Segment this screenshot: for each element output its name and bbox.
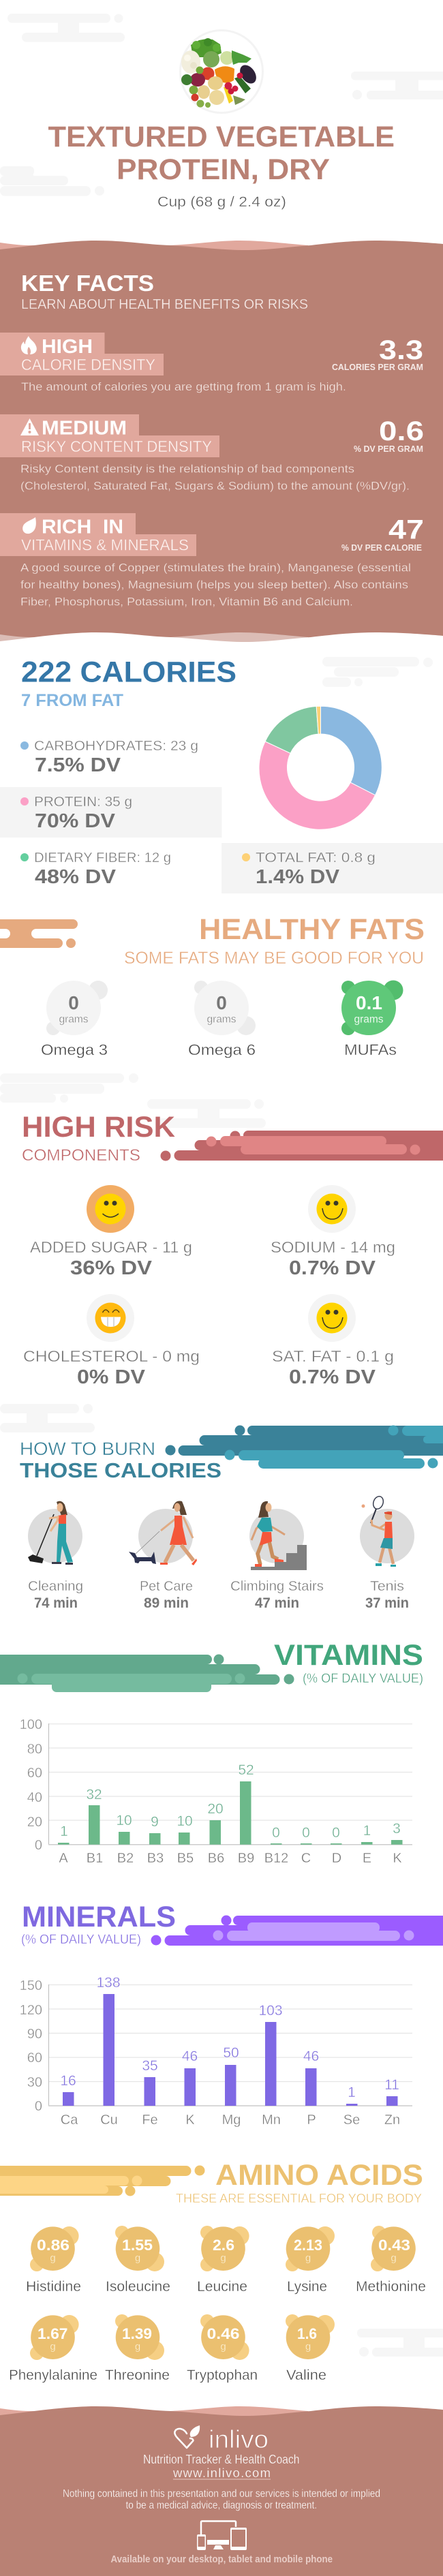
- bar chart: vitamins: E: [363, 1851, 371, 1866]
- bar chart: minerals: Se: [343, 2113, 360, 2128]
- amino: tryptophan: Tryptophan: [187, 2367, 258, 2383]
- activity: cleaning: 74 min: [34, 1595, 78, 1611]
- amino: leucine: g: [220, 2252, 226, 2264]
- bar chart: minerals: 1: [348, 2085, 356, 2100]
- activity: pet care: Pet Care: [140, 1579, 193, 1594]
- component: sodium: SODIUM - 14 mg: [271, 1238, 395, 1256]
- amino: valine: 1.6: [297, 2325, 317, 2342]
- bar chart: vitamins: 52: [238, 1762, 254, 1778]
- vitamins subheading: (% OF DAILY VALUE): [303, 1672, 423, 1686]
- bar chart: vitamins: B12: [264, 1851, 288, 1866]
- activity: cleaning: Cleaning: [28, 1579, 83, 1594]
- amino acids heading: AMINO ACIDS: [215, 2159, 423, 2192]
- component: cholesterol: [23, 1294, 200, 1388]
- amino: phenylalanine: Phenylalanine: [9, 2367, 97, 2383]
- panel: burn calories: [0, 1404, 443, 1611]
- amino: isoleucine: Isoleucine: [106, 2279, 170, 2295]
- fact: rich in vitamins and minerals: 47: [388, 515, 424, 545]
- fact: risky content density: RISKY CONTENT DENSITY: [21, 438, 212, 455]
- activity: climbing stairs: [230, 1501, 324, 1611]
- fat: MUFAs: grams: [354, 1014, 384, 1026]
- fact: calorie density: [0, 333, 423, 393]
- activity: tennis: 37 min: [365, 1595, 409, 1611]
- amino: phenylalanine: g: [50, 2341, 56, 2352]
- bar chart: vitamins: 80: [27, 1742, 42, 1757]
- fat: omega 6: 0: [216, 992, 227, 1013]
- amino: lysine: g: [305, 2252, 311, 2264]
- bar chart: minerals: [20, 1975, 412, 2128]
- fat: omega 6: [188, 981, 256, 1058]
- amino: lysine: 2.13: [294, 2237, 322, 2254]
- bar chart: vitamins: B2: [117, 1851, 134, 1866]
- bar chart: vitamins: 40: [27, 1790, 42, 1805]
- amino: lysine: Lysine: [287, 2279, 327, 2295]
- bar chart: vitamins: B9: [238, 1851, 254, 1866]
- banner: vitamins: [0, 1655, 294, 1692]
- healthy fats subheading: SOME FATS MAY BE GOOD FOR YOU: [124, 949, 424, 968]
- banner: high risk: [161, 1131, 443, 1161]
- component: cholesterol: 0% DV: [77, 1366, 146, 1388]
- bar chart: minerals: 50: [223, 2045, 239, 2061]
- bar chart: vitamins: 20: [27, 1815, 42, 1830]
- component: cholesterol: CHOLESTEROL - 0 mg: [23, 1347, 200, 1365]
- high risk subheading: COMPONENTS: [22, 1146, 140, 1165]
- activity: cleaning: [28, 1501, 83, 1611]
- bar chart: vitamins: 9: [151, 1814, 159, 1830]
- panel: high risk: [0, 1073, 443, 1388]
- bar chart: minerals: 150: [20, 1978, 42, 1993]
- activity: climbing stairs: 47 min: [255, 1595, 299, 1611]
- activity: tennis: [360, 1495, 414, 1611]
- icon: devices: [197, 2521, 247, 2550]
- fact: rich in vitamins and minerals: % DV PER CALORIE: [341, 543, 422, 553]
- fact: risky content density: [0, 414, 424, 493]
- bar chart: minerals: K: [185, 2113, 195, 2128]
- bar chart: vitamins: B1: [87, 1851, 103, 1866]
- logo: inlivo: inlivo: [209, 2425, 269, 2453]
- activity: tennis: Tenis: [370, 1579, 404, 1594]
- donut chart: [259, 706, 382, 829]
- burn calories heading: HOW TO BURN: [20, 1439, 155, 1459]
- bar chart: minerals: 103: [258, 2003, 283, 2019]
- fact: risky content density: (Cholesterol, Saturated Fat, Sugars & Sodium) to the amount (%DV/gr).: [20, 480, 410, 493]
- icon: flame: [21, 336, 37, 354]
- healthy fats heading: HEALTHY FATS: [199, 913, 425, 946]
- bar chart: minerals: 138: [96, 1975, 121, 1991]
- amino: phenylalanine: [9, 2315, 97, 2383]
- amino: lysine: [286, 2226, 330, 2295]
- burn calories heading: [20, 1439, 222, 1482]
- fact: calorie density: 3.3: [379, 335, 423, 365]
- bar chart: vitamins: B3: [147, 1851, 164, 1866]
- fat: MUFAs: MUFAs: [344, 1041, 397, 1058]
- bar chart: vitamins: 0: [35, 1838, 42, 1853]
- macro: total fat: 1.4% DV: [256, 866, 340, 888]
- bar chart: vitamins: 20: [207, 1801, 224, 1817]
- amino: threonine: g: [135, 2341, 140, 2352]
- fact: rich in vitamins and minerals: [0, 513, 424, 609]
- bar chart: minerals: 11: [384, 2077, 399, 2093]
- bar chart: vitamins: 10: [116, 1813, 132, 1828]
- title: PROTEIN, DRY: [117, 153, 330, 186]
- fat: omega 3: 0: [68, 992, 79, 1013]
- component: saturated fat: SAT. FAT - 0.1 g: [272, 1347, 394, 1365]
- bar chart: vitamins: 60: [27, 1766, 42, 1781]
- logo: inlivo: [174, 2425, 269, 2453]
- amino: leucine: Leucine: [197, 2279, 247, 2295]
- vitamins heading: VITAMINS: [274, 1639, 423, 1672]
- disclaimer: Nothing contained in this presentation and our services is intended or implied: [63, 2488, 380, 2500]
- amino: histidine: g: [50, 2252, 56, 2264]
- macro: protein: PROTEIN: 35 g: [34, 795, 132, 810]
- amino: histidine: [26, 2226, 81, 2295]
- macro: protein: 70% DV: [35, 810, 116, 832]
- banner: minerals: [151, 1915, 443, 1946]
- amino: valine: Valine: [286, 2367, 326, 2383]
- component: added sugar: ADDED SUGAR - 11 g: [30, 1238, 192, 1256]
- key facts subheading: LEARN ABOUT HEALTH BENEFITS OR RISKS: [21, 297, 308, 312]
- panel: amino acids: [0, 2159, 443, 2383]
- bar chart: vitamins: [20, 1717, 412, 1866]
- amino: tryptophan: 0.46: [207, 2325, 240, 2342]
- bar chart: minerals: Ca: [61, 2113, 78, 2128]
- calories heading: 222 CALORIES: [21, 656, 236, 689]
- bar chart: minerals: 46: [182, 2049, 198, 2064]
- fat: omega 3: grams: [59, 1014, 89, 1026]
- bar chart: minerals: Zn: [384, 2113, 400, 2128]
- bar chart: minerals: P: [307, 2113, 316, 2128]
- bar chart: minerals: 120: [20, 2003, 42, 2018]
- macro: dietary fiber: [20, 850, 171, 888]
- fat: omega 6: Omega 6: [188, 1041, 256, 1058]
- bar chart: vitamins: 32: [86, 1787, 102, 1803]
- icon: leaf: [22, 517, 36, 534]
- banner: amino acids: [0, 2166, 204, 2196]
- fat: omega 3: [41, 981, 108, 1058]
- fact: calorie density: HIGH: [42, 336, 93, 358]
- amino acids subheading: THESE ARE ESSENTIAL FOR YOUR BODY: [176, 2191, 422, 2205]
- banner: burn calories: [165, 1426, 443, 1469]
- fact: calorie density: CALORIE DENSITY: [21, 356, 155, 373]
- amino: valine: [286, 2315, 330, 2383]
- decorative clouds: header: [0, 14, 443, 196]
- amino: methionine: [356, 2226, 426, 2295]
- amino: tryptophan: g: [220, 2341, 226, 2352]
- bar chart: minerals: Mn: [262, 2113, 281, 2128]
- macro: dietary fiber: DIETARY FIBER: 12 g: [34, 850, 171, 865]
- macro: carbohydrates: 7.5% DV: [35, 754, 121, 776]
- amino: methionine: 0.43: [378, 2237, 410, 2254]
- burn calories heading: THOSE CALORIES: [20, 1458, 222, 1482]
- amino: methionine: Methionine: [356, 2279, 426, 2295]
- amino: methionine: g: [391, 2252, 397, 2264]
- bar chart: minerals: 90: [27, 2027, 42, 2042]
- bar chart: minerals: 0: [35, 2099, 42, 2114]
- amino: histidine: 0.86: [37, 2237, 70, 2254]
- activity: climbing stairs: Climbing Stairs: [230, 1579, 324, 1594]
- bar chart: minerals: 30: [27, 2075, 42, 2090]
- disclaimer: to be a medical advice, diagnosis or treatment.: [125, 2500, 317, 2511]
- macro: carbohydrates: CARBOHYDRATES: 23 g: [34, 739, 198, 754]
- bar chart: vitamins: 0: [272, 1825, 280, 1841]
- footer: [0, 2406, 443, 2576]
- amino: leucine: [197, 2226, 247, 2295]
- fact: risky content density: Risky Content density is the relationship of bad components: [20, 463, 354, 476]
- fact: rich in vitamins and minerals: VITAMINS & MINERALS: [21, 536, 189, 553]
- bar chart: vitamins: 3: [393, 1821, 401, 1837]
- panel: vitamins: [0, 1639, 423, 1866]
- high risk heading: HIGH RISK: [22, 1111, 175, 1144]
- fact: rich in vitamins and minerals: A good source of Copper (stimulates the brain), Manganese (essential: [20, 562, 411, 574]
- macro: protein: [0, 787, 222, 838]
- amino: valine: g: [305, 2341, 311, 2352]
- bar chart: vitamins: B5: [177, 1851, 194, 1866]
- bar chart: vitamins: B6: [208, 1851, 224, 1866]
- macro: dietary fiber: 48% DV: [35, 866, 117, 888]
- availability note: Available on your desktop, tablet and mobile phone: [110, 2554, 333, 2565]
- bar chart: minerals: Cu: [100, 2113, 118, 2128]
- macro: total fat: [222, 843, 443, 893]
- macro: total fat: TOTAL FAT: 0.8 g: [256, 850, 376, 865]
- minerals subheading: (% OF DAILY VALUE): [21, 1933, 141, 1947]
- bar chart: vitamins: 1: [60, 1824, 68, 1839]
- fat: MUFAs: 0.1: [356, 992, 382, 1013]
- fat: omega 3: Omega 3: [41, 1041, 108, 1058]
- icon: warning triangle: [20, 418, 39, 435]
- bar chart: vitamins: 10: [177, 1813, 193, 1829]
- bar chart: minerals: Mg: [222, 2113, 241, 2128]
- macro: carbohydrates: [20, 739, 198, 776]
- fact: risky content density: 0.6: [379, 416, 424, 446]
- bar chart: minerals: 35: [142, 2058, 158, 2074]
- title: TEXTURED VEGETABLE: [48, 121, 395, 153]
- website link: www.inlivo.com: [172, 2466, 271, 2480]
- bar chart: vitamins: C: [301, 1851, 311, 1866]
- fact: rich in vitamins and minerals: for healthy bones), Magnesium (helps you sleep better). Also contains: [20, 579, 408, 592]
- component: sodium: [271, 1185, 395, 1279]
- amino: threonine: [105, 2315, 170, 2383]
- minerals heading: MINERALS: [22, 1901, 176, 1933]
- food image: vegetables: [180, 30, 263, 113]
- amino: phenylalanine: 1.67: [37, 2325, 68, 2342]
- fact: calorie density: CALORIES PER GRAM: [332, 363, 423, 372]
- bar chart: vitamins: 0: [332, 1825, 340, 1841]
- bar chart: vitamins: A: [59, 1851, 68, 1866]
- fact: risky content density: % DV PER GRAM: [354, 444, 423, 454]
- bar chart: vitamins: 0: [302, 1825, 310, 1841]
- amino: isoleucine: 1.55: [122, 2237, 153, 2254]
- component: sodium: 0.7% DV: [289, 1257, 376, 1279]
- fact: rich in vitamins and minerals: RICH IN: [42, 517, 123, 538]
- bar chart: vitamins: D: [332, 1851, 341, 1866]
- fat: omega 6: grams: [207, 1014, 236, 1026]
- banner: healthy fats: [0, 919, 78, 948]
- fat: MUFAs: [341, 980, 403, 1058]
- activity: pet care: [129, 1501, 197, 1611]
- key facts heading: KEY FACTS: [21, 271, 154, 296]
- panel: minerals: [20, 1901, 443, 2128]
- amino: histidine: Histidine: [26, 2279, 81, 2295]
- amino: threonine: 1.39: [122, 2325, 152, 2342]
- amino: leucine: 2.6: [213, 2237, 234, 2254]
- fact: calorie density: The amount of calories you are getting from 1 gram is high.: [21, 381, 346, 393]
- fact: rich in vitamins and minerals: Fiber, Phosphorus, Potassium, Iron, Vitamin B6 and Calcium.: [20, 596, 353, 609]
- bar chart: minerals: 16: [60, 2073, 76, 2089]
- serving size: Cup (68 g / 2.4 oz): [157, 194, 286, 210]
- amino: isoleucine: [106, 2226, 170, 2295]
- component: saturated fat: [272, 1294, 394, 1388]
- bar chart: vitamins: 1: [363, 1823, 371, 1839]
- activity: pet care: 89 min: [144, 1595, 189, 1611]
- component: saturated fat: 0.7% DV: [289, 1366, 376, 1388]
- amino: tryptophan: [187, 2315, 258, 2383]
- fact: risky content density: MEDIUM: [42, 417, 127, 439]
- tagline: Nutrition Tracker & Health Coach: [143, 2452, 300, 2466]
- panel: healthy fats: [0, 913, 425, 1058]
- bar chart: minerals: Fe: [142, 2113, 158, 2128]
- component: added sugar: [30, 1185, 192, 1279]
- disclaimer: [63, 2488, 380, 2511]
- bar chart: minerals: 46: [303, 2049, 319, 2064]
- bar chart: vitamins: K: [393, 1851, 402, 1866]
- calories from fat: 7 FROM FAT: [21, 691, 123, 710]
- panel: key facts: [0, 241, 443, 664]
- amino: isoleucine: g: [135, 2252, 140, 2264]
- bar chart: vitamins: 100: [20, 1717, 42, 1732]
- bar chart: minerals: 60: [27, 2051, 42, 2066]
- component: added sugar: 36% DV: [70, 1257, 153, 1279]
- panel: calories: [0, 656, 443, 893]
- amino: threonine: Threonine: [105, 2367, 170, 2383]
- title: [48, 121, 395, 186]
